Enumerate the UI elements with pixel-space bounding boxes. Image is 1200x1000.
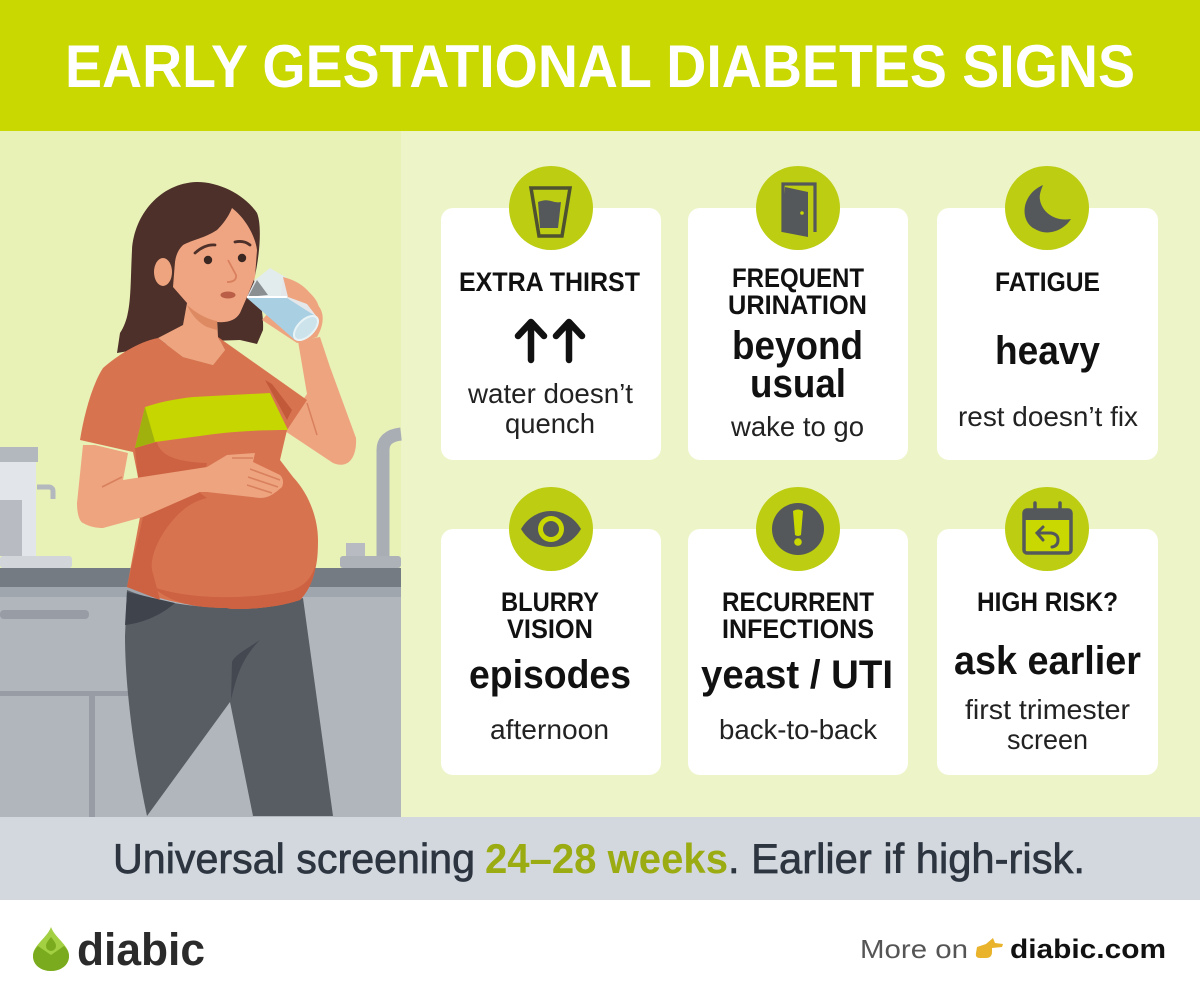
icon: moon <box>1005 166 1089 250</box>
fingers <box>283 277 319 312</box>
footer link <box>860 934 1166 964</box>
panel: signs background <box>401 131 1200 817</box>
heading: URINATION <box>728 290 867 320</box>
note: wake to go <box>730 411 864 442</box>
note <box>965 694 1130 755</box>
note: rest doesn’t fix <box>958 401 1138 432</box>
icon: double up arrows <box>518 322 582 360</box>
shirt stripe <box>135 393 288 448</box>
heading <box>722 587 874 644</box>
raised arm <box>282 337 356 465</box>
face features <box>195 241 250 298</box>
footer link: More on <box>860 934 968 964</box>
arm on belly <box>77 445 283 528</box>
woman <box>77 182 356 816</box>
value: ask earlier <box>954 639 1141 683</box>
title: EARLY GESTATIONAL DIABETES SIGNS <box>65 33 1135 100</box>
value: yeast / UTI <box>701 653 893 697</box>
heading: VISION <box>507 614 593 644</box>
glass of water <box>247 268 322 344</box>
value: episodes <box>469 653 631 697</box>
card: blurry vision <box>441 487 661 775</box>
face <box>173 208 257 322</box>
value: heavy <box>995 329 1101 373</box>
note: screen <box>1007 724 1088 755</box>
value: usual <box>750 362 846 406</box>
pants <box>125 590 333 816</box>
screening banner <box>0 817 1200 900</box>
icon: calendar <box>1005 487 1089 571</box>
heading: EXTRA THIRST <box>459 267 640 297</box>
icon: glass <box>509 166 593 250</box>
card: fatigue <box>937 166 1158 460</box>
footer link: diabic.com <box>1010 934 1166 964</box>
icon: door <box>756 166 840 250</box>
heading: HIGH RISK? <box>977 587 1118 617</box>
shirt <box>80 337 318 609</box>
heading: BLURRY <box>501 587 599 617</box>
card: frequent urination <box>688 166 908 460</box>
note: first trimester <box>965 694 1130 725</box>
note <box>467 378 633 439</box>
card: extra thirst <box>441 166 661 460</box>
neck <box>158 303 225 365</box>
faucet <box>340 434 401 568</box>
icon: pointing hand <box>976 938 1003 958</box>
heading: RECURRENT <box>722 587 874 617</box>
neck shadow <box>187 305 217 330</box>
note: water doesn’t <box>467 378 633 409</box>
logo: diabic: diabic <box>77 924 205 975</box>
counter and cabinets <box>0 568 401 817</box>
card: recurrent infections <box>688 487 908 775</box>
screening banner: 24–28 weeks <box>485 835 728 882</box>
shirt shadow <box>127 442 316 609</box>
heading <box>728 263 867 320</box>
screening banner: Universal screening <box>113 835 475 882</box>
heading: FATIGUE <box>995 267 1100 297</box>
value: beyond <box>732 324 863 368</box>
icon: exclamation <box>756 487 840 571</box>
water filter appliance <box>0 447 72 568</box>
panel: kitchen illustration <box>0 131 401 817</box>
note: quench <box>505 408 595 439</box>
heading <box>501 587 599 644</box>
header banner <box>0 0 1200 131</box>
hair <box>117 182 263 353</box>
hand behind glass <box>262 277 323 343</box>
note: afternoon <box>490 714 609 745</box>
value <box>732 324 863 406</box>
note: back-to-back <box>719 714 878 745</box>
ear <box>154 258 172 286</box>
screening banner: . Earlier if high-risk. <box>728 835 1085 882</box>
heading: INFECTIONS <box>722 614 874 644</box>
card: high risk <box>937 487 1158 775</box>
icon: eye <box>509 487 593 571</box>
heading: FREQUENT <box>732 263 864 293</box>
